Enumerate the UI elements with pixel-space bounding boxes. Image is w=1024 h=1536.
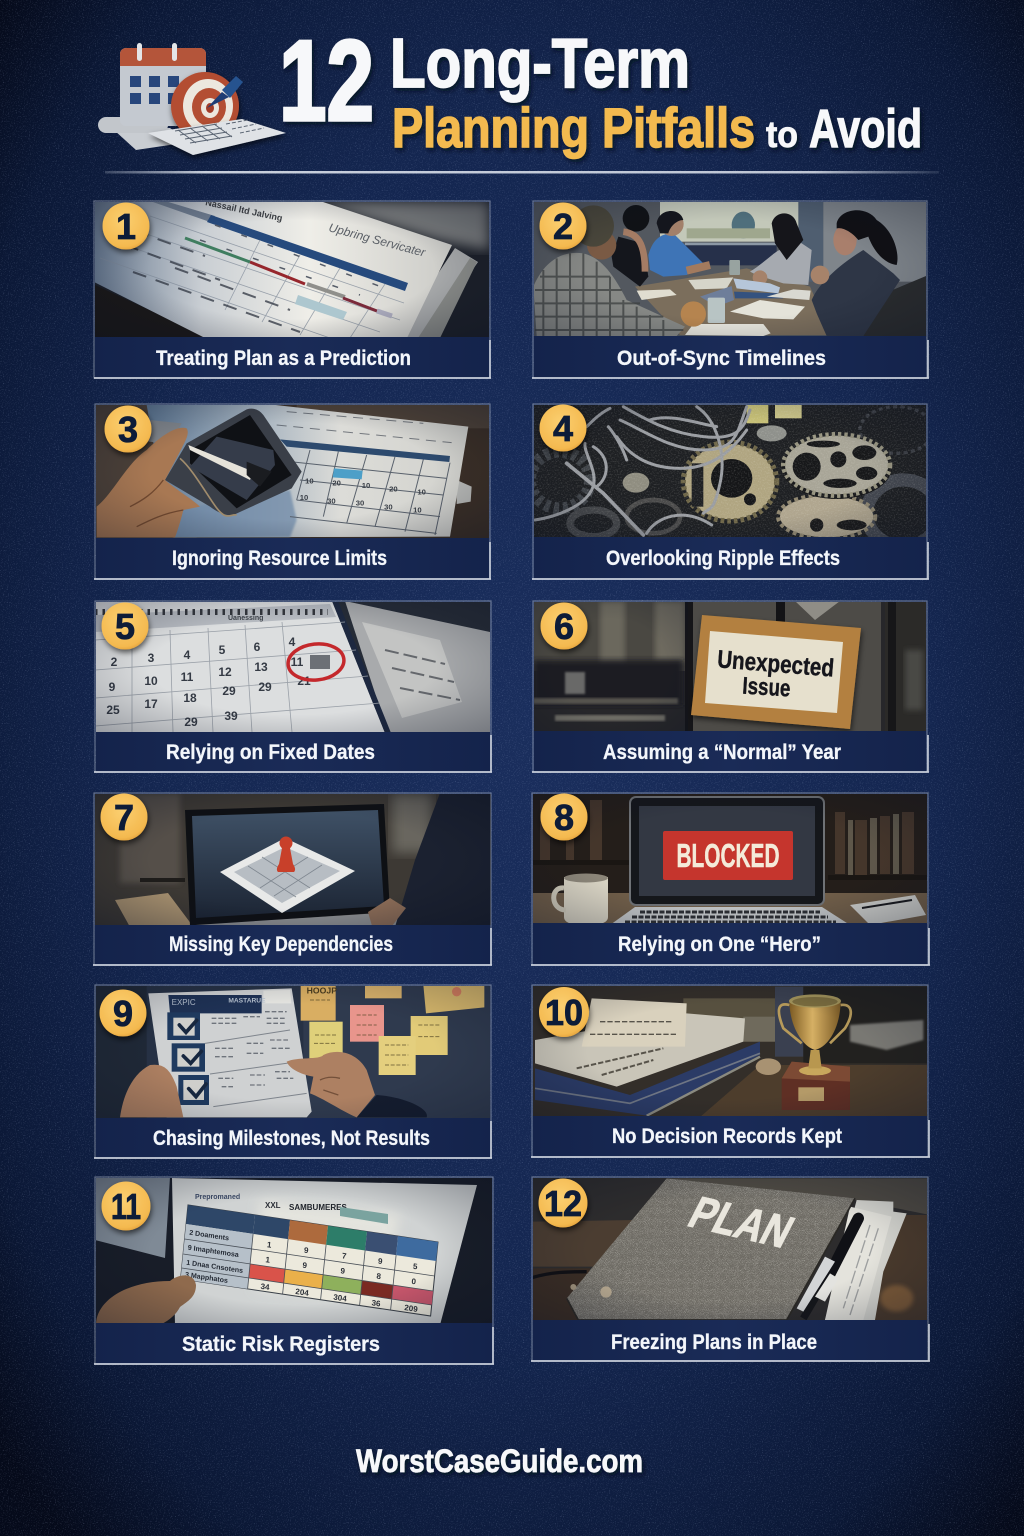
title: to bbox=[766, 114, 798, 155]
header divider bbox=[105, 171, 939, 174]
light foreground gear bbox=[778, 495, 875, 539]
badge 11 bbox=[102, 1182, 150, 1230]
caption bar 11 bbox=[94, 1177, 494, 1364]
title: Avoid bbox=[809, 99, 922, 159]
photo: team meeting bbox=[530, 200, 930, 340]
caption bar 3 bbox=[94, 404, 491, 579]
photo: unexpected issue sign bbox=[533, 601, 927, 733]
photo: wallet and calendar: 10 bbox=[305, 476, 314, 485]
caption bar 9 bbox=[94, 985, 492, 1158]
badge 1: 1 bbox=[116, 206, 136, 247]
risk table: 7 bbox=[342, 1251, 347, 1261]
photo: wall calendar with circled date: 21 bbox=[297, 674, 311, 688]
cork board and paper sign: Issue bbox=[742, 673, 791, 702]
caption bar 7: Missing Key Dependencies bbox=[169, 933, 393, 956]
panel: 5 relying on fixed dates bbox=[94, 601, 492, 772]
badge 2: 2 bbox=[553, 206, 573, 247]
risk table: 9 Imaphtemosa bbox=[187, 1245, 239, 1259]
person in grey blazer bbox=[750, 213, 812, 285]
photo: planning sheets: Nassail ltd Jalving bbox=[205, 197, 283, 223]
panel: 2 out-of-sync timelines bbox=[530, 200, 930, 378]
badge 12: 12 bbox=[544, 1183, 582, 1224]
risk table bbox=[181, 1205, 438, 1316]
photo: risk matrix sheet: SAMBUMERES bbox=[289, 1203, 347, 1212]
sleeve bbox=[357, 1095, 427, 1117]
caption bar 12 bbox=[531, 1177, 930, 1361]
badge 5: 5 bbox=[115, 606, 135, 647]
panel: 11 static risk registers bbox=[94, 1177, 494, 1364]
photo: checklist and sticky notes bbox=[90, 980, 491, 1120]
photo: wall calendar with circled date: 9 bbox=[109, 680, 116, 694]
risk table: 5 bbox=[413, 1262, 418, 1271]
footer website: WorstCaseGuide.com bbox=[356, 1443, 643, 1479]
badge 7: 7 bbox=[114, 797, 134, 838]
laptop bbox=[610, 796, 850, 925]
badge 8: 8 bbox=[554, 797, 574, 838]
panel: 1 treating plan as a prediction bbox=[94, 197, 491, 378]
photo: wall calendar with circled date: 17 bbox=[144, 697, 158, 711]
photo: wallet and calendar: 10 bbox=[413, 506, 422, 515]
photo: wall calendar with circled date: 5 bbox=[219, 643, 226, 657]
panel: 7 missing key dependencies bbox=[93, 793, 492, 965]
cork board and paper sign: Unexpected bbox=[716, 645, 835, 683]
badge 11: 11 bbox=[111, 1186, 141, 1227]
blocked alert: BLOCKED bbox=[676, 837, 780, 874]
badge 2 bbox=[540, 202, 586, 250]
photo: wall calendar with circled date bbox=[95, 601, 491, 733]
caption bar 2: Out-of-Sync Timelines bbox=[617, 347, 826, 370]
panel: 12 freezing plans in place bbox=[530, 1175, 930, 1361]
person in blue shirt bbox=[648, 211, 710, 277]
photo: wall calendar with circled date: 11 bbox=[181, 670, 194, 684]
checklist sheet bbox=[148, 988, 312, 1117]
photo: checklist and sticky notes: MASTARUE bbox=[228, 998, 266, 1005]
photo: wall calendar with circled date: 29 bbox=[222, 684, 236, 698]
notebook bbox=[535, 1042, 760, 1116]
photo: wall calendar with circled date: 2 bbox=[111, 655, 118, 669]
hand holding wallet bbox=[97, 428, 200, 537]
photo: wallet and calendar bbox=[90, 400, 493, 540]
caption bar 4: Overlooking Ripple Effects bbox=[606, 547, 840, 570]
caption bar 12: Freezing Plans in Place bbox=[611, 1331, 817, 1354]
woman in dark jacket bbox=[811, 210, 928, 336]
sticky notes bbox=[301, 985, 484, 1075]
photo: checklist and sticky notes: HOOJP bbox=[307, 985, 337, 995]
photo: wall calendar with circled date: 12 bbox=[218, 665, 232, 679]
risk table: 2 Doaments bbox=[189, 1230, 229, 1242]
photo: wallet and calendar: 10 bbox=[300, 493, 308, 502]
risk table: 1 Dnaa Cnsotens bbox=[186, 1260, 243, 1275]
badge 3 bbox=[104, 406, 152, 452]
photo: wall calendar with circled date: 3 bbox=[148, 651, 155, 665]
title: Long-Term bbox=[390, 24, 690, 102]
photo: wallet and calendar: 30 bbox=[327, 496, 336, 505]
photo: checklist and sticky notes: EXPIC bbox=[172, 998, 196, 1007]
photo: wall calendar with circled date: 4 bbox=[184, 648, 191, 662]
pens with clips bbox=[797, 1218, 858, 1318]
panel: 9 chasing milestones bbox=[90, 980, 492, 1158]
title bbox=[279, 18, 922, 159]
blocked alert bbox=[663, 831, 793, 880]
caption bar 5: Relying on Fixed Dates bbox=[166, 741, 375, 764]
photo: wall calendar with circled date: 29 bbox=[184, 715, 198, 729]
photo: risk matrix sheet: Prepromaned bbox=[195, 1194, 240, 1201]
caption bar 10: No Decision Records Kept bbox=[612, 1125, 842, 1148]
plan sheet on screen bbox=[220, 838, 355, 913]
person in dark top bbox=[612, 205, 649, 287]
photo: metal plan binder bbox=[530, 1175, 930, 1325]
panel: 10 no decision records bbox=[530, 985, 930, 1157]
risk table: 9 bbox=[302, 1261, 308, 1270]
risk table: 1 bbox=[265, 1255, 271, 1265]
photo: wall calendar with circled date: 13 bbox=[254, 660, 268, 674]
panel: 4 overlooking ripple effects bbox=[530, 400, 940, 579]
panel: 8 relying on one hero bbox=[531, 793, 930, 965]
caption bar 6: Assuming a “Normal” Year bbox=[603, 741, 841, 764]
caption bar 3: Ignoring Resource Limits bbox=[172, 547, 387, 570]
risk table: 8 bbox=[376, 1272, 382, 1281]
badge 3: 3 bbox=[118, 409, 138, 450]
risk table: 3 Mapphatos bbox=[185, 1272, 228, 1285]
caption bar 8 bbox=[531, 793, 930, 965]
caption bar 6 bbox=[532, 601, 929, 772]
caption bar 1: Treating Plan as a Prediction bbox=[156, 347, 411, 370]
circled date: 11 bbox=[291, 655, 304, 669]
photo: risk matrix sheet bbox=[95, 1177, 493, 1325]
cork board and paper sign bbox=[691, 615, 861, 729]
badge 1 bbox=[102, 202, 150, 250]
title: 12 bbox=[279, 18, 374, 145]
caption bar 5 bbox=[94, 601, 492, 772]
photo: papers and trophy bbox=[530, 985, 930, 1120]
gold trophy bbox=[779, 994, 851, 1110]
photo: planning sheets: Upbring Servicater bbox=[327, 220, 428, 260]
right hand bbox=[287, 1052, 375, 1117]
photo: wall calendar with circled date: 39 bbox=[224, 709, 238, 723]
caption bar 2 bbox=[532, 201, 929, 378]
photo: wallet and calendar: 10 bbox=[417, 488, 426, 497]
badge 6 bbox=[540, 602, 588, 650]
photo: gears and cables bbox=[534, 405, 926, 537]
badge 7 bbox=[100, 794, 148, 840]
badge 10: 10 bbox=[545, 992, 583, 1033]
badge 6: 6 bbox=[554, 606, 574, 647]
dark background gears bbox=[530, 407, 940, 547]
binder cover: PLAN bbox=[681, 1187, 802, 1257]
risk table: 1 bbox=[267, 1240, 272, 1250]
loose papers bbox=[535, 998, 745, 1087]
risk table: 9 bbox=[340, 1266, 346, 1276]
caption bar 8: Relying on One “Hero” bbox=[618, 933, 821, 956]
badge 5 bbox=[102, 602, 148, 650]
photo: wallet and calendar: 30 bbox=[356, 498, 364, 507]
badge 9: 9 bbox=[113, 993, 133, 1034]
main spoked gear bbox=[782, 434, 892, 499]
cables bbox=[535, 407, 750, 535]
caption bar 11: Static Risk Registers bbox=[182, 1333, 380, 1356]
photo: wallet and calendar: 20 bbox=[389, 484, 398, 493]
man in plaid shirt bbox=[533, 205, 706, 336]
badge 4: 4 bbox=[553, 408, 573, 449]
badge 9 bbox=[100, 990, 146, 1036]
papers and glasses on table bbox=[637, 260, 811, 336]
circled date bbox=[286, 641, 346, 683]
photo: wallet and calendar: 10 bbox=[362, 481, 370, 490]
header icon: calendar, target and plans bbox=[98, 43, 286, 155]
parts and coins bbox=[623, 405, 802, 493]
badge 4 bbox=[540, 404, 586, 452]
photo: blocked laptop on desk bbox=[532, 793, 928, 925]
photo: wall calendar with circled date: 10 bbox=[144, 674, 158, 688]
risk table: 9 bbox=[304, 1246, 309, 1255]
red pawn bbox=[277, 836, 295, 872]
photo: wall calendar with circled date: 29 bbox=[258, 680, 272, 694]
binder cover bbox=[563, 1175, 857, 1322]
risk table: 304 bbox=[333, 1293, 348, 1304]
photo: wall calendar with circled date: 25 bbox=[106, 703, 120, 717]
photo: wallet and calendar: 20 bbox=[332, 478, 341, 487]
risk table: 204 bbox=[295, 1287, 310, 1298]
risk table: 36 bbox=[371, 1298, 381, 1309]
badge 8 bbox=[540, 794, 588, 840]
photo: wall calendar with circled date: Uanessing bbox=[228, 615, 263, 622]
caption bar 1 bbox=[94, 201, 491, 378]
panel: 6 assuming a normal year bbox=[532, 601, 929, 772]
photo: wallet and calendar: 30 bbox=[384, 502, 393, 511]
photo: planning sheets bbox=[94, 197, 490, 338]
checkboxes bbox=[167, 1012, 209, 1105]
caption bar 7 bbox=[93, 793, 492, 965]
coffee mug bbox=[554, 874, 608, 925]
photo: wall calendar with circled date: 6 bbox=[254, 640, 261, 654]
photo: risk matrix sheet: XXL bbox=[265, 1201, 281, 1210]
gold gear bbox=[683, 442, 777, 521]
risk table: 0 bbox=[411, 1277, 417, 1286]
risk table: 9 bbox=[378, 1257, 383, 1266]
title: Planning Pitfalls bbox=[392, 96, 755, 159]
photo: wall calendar with circled date: 18 bbox=[183, 691, 197, 705]
risk table: 34 bbox=[260, 1282, 270, 1292]
photo: laptop with game piece on plan bbox=[94, 793, 492, 927]
badge 10 bbox=[539, 987, 589, 1037]
caption bar 9: Chasing Milestones, Not Results bbox=[153, 1127, 430, 1150]
panel: 3 ignoring resource limits bbox=[90, 400, 493, 579]
risk table: 209 bbox=[404, 1303, 419, 1314]
photo: wall calendar with circled date: 4 bbox=[289, 635, 296, 649]
caption bar 10 bbox=[531, 985, 930, 1157]
caption bar 4 bbox=[532, 404, 929, 579]
hand holding sheet bbox=[96, 1275, 196, 1325]
badge 12 bbox=[538, 1178, 588, 1228]
left hand bbox=[120, 1065, 183, 1117]
